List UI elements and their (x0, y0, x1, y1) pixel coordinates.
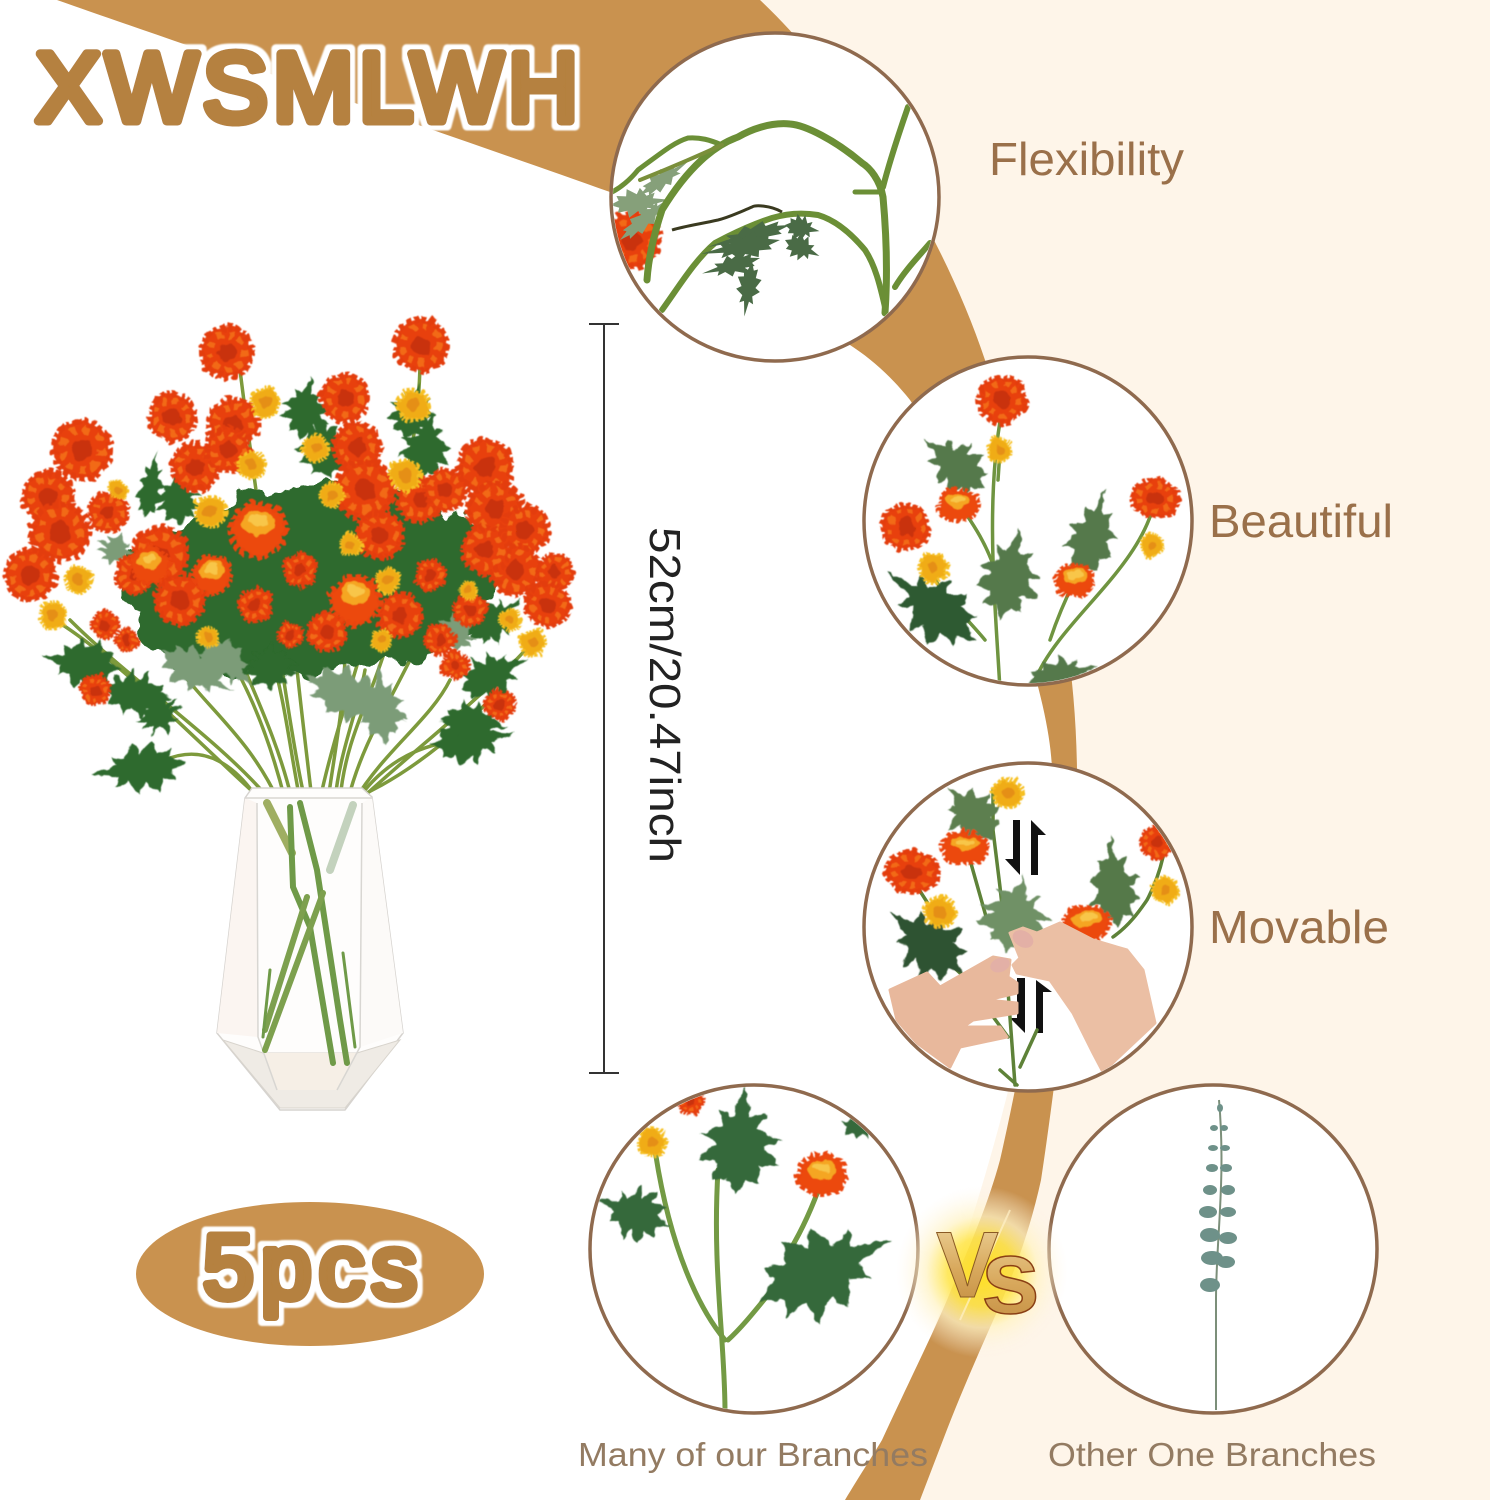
caption: many of our branches: Many of our Branches (578, 1436, 928, 1473)
branch and hands (869, 768, 1178, 1085)
versus badge (896, 1186, 1068, 1358)
bent stems and leaf (605, 107, 930, 318)
height dimension bracket (589, 324, 619, 1073)
caption: other one branches: Other One Branches (1048, 1436, 1376, 1473)
curved brown band (57, 0, 1077, 1500)
icon: right hand (1009, 923, 1155, 1072)
feature label: Movable: Movable (1209, 901, 1389, 953)
title: brand name: XWSMLWH (36, 33, 578, 142)
stems (55, 360, 530, 800)
quantity badge: 5pcs (136, 1202, 484, 1346)
panel: other branch comparison circle (1049, 1085, 1377, 1413)
red flower heads (5, 319, 573, 720)
panel: flexibility circle (605, 33, 939, 361)
yellow flower heads (40, 388, 546, 656)
cream background panel (760, 0, 1490, 1500)
versus badge: V (936, 1212, 999, 1317)
vase base (223, 1040, 400, 1108)
panel: our branches comparison circle (588, 1082, 918, 1413)
glass vase (217, 788, 403, 1110)
stems inside vase (263, 803, 355, 1063)
thick branch close-up (599, 1087, 892, 1409)
panel: beautiful circle (864, 357, 1192, 704)
single branch with flowers (868, 377, 1178, 704)
bouquet of orange flowers (5, 319, 573, 801)
eucalyptus sprig (1199, 1100, 1237, 1410)
icon: left hand (890, 955, 1017, 1067)
versus badge: s (981, 1218, 1040, 1336)
feature label: Flexibility: Flexibility (989, 133, 1184, 185)
bicolour flower heads (131, 503, 379, 624)
icon: up and down arrows (1005, 820, 1052, 1033)
leafy backing mass (125, 485, 492, 674)
pale foliage (92, 526, 486, 747)
dark foliage (37, 372, 538, 801)
quantity badge: 5pcs: 5pcs (203, 1217, 417, 1318)
feature label: Beautiful: Beautiful (1209, 495, 1393, 547)
panel: movable circle (864, 763, 1192, 1091)
height measurement label: 52cm/20.47inch (640, 527, 689, 863)
